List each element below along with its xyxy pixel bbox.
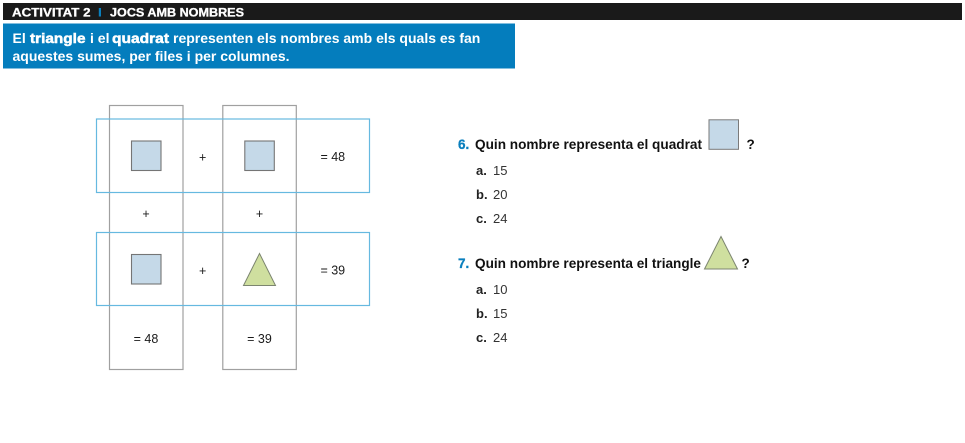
icon: triangle <box>704 236 738 269</box>
row outline 1 <box>96 119 370 192</box>
question 7: 7. <box>458 256 469 271</box>
instruction banner: aquestes sumes, per files i per columnes. <box>12 48 290 64</box>
question 6: 6. <box>458 137 469 152</box>
question 7: 15 <box>493 306 507 321</box>
question 7: 24 <box>493 330 507 345</box>
icon: square <box>709 120 738 149</box>
column outline 2 <box>223 106 296 370</box>
puzzle grid <box>96 106 370 370</box>
question 6: ? <box>746 137 755 152</box>
square row 1 column 2 <box>245 141 274 170</box>
header bar: activity title: ACTIVITAT 2 <box>12 8 90 20</box>
square row 2 column 1 <box>132 254 161 284</box>
column 1 sum: = 48 <box>134 332 158 346</box>
column outline 1 <box>110 106 183 370</box>
instruction banner: representen els nombres amb els quals es fan <box>173 30 480 46</box>
instruction banner: triangle <box>30 30 86 46</box>
question 7: b. <box>476 306 488 321</box>
question 7 <box>458 236 750 345</box>
question 6: a. <box>476 163 487 178</box>
question 6: 15 <box>493 163 507 178</box>
triangle row 2 column 2 <box>244 254 276 286</box>
row 1 sum: = 48 <box>320 150 345 164</box>
question 7: c. <box>476 330 487 345</box>
instruction banner: El <box>12 30 26 46</box>
question 7: Quin nombre representa el triangle <box>475 256 701 271</box>
instruction banner: i el <box>90 30 109 46</box>
row outline 2 <box>96 232 370 306</box>
question 6: b. <box>476 187 488 202</box>
row 2 sum: = 39 <box>320 264 345 278</box>
question 6 <box>458 120 755 226</box>
header bar: activity title <box>3 3 962 20</box>
column 2 sum: = 39 <box>247 332 272 346</box>
question 6: c. <box>476 211 487 226</box>
square row 1 column 1 <box>132 141 161 170</box>
question 7: 10 <box>493 282 507 297</box>
question 7: a. <box>476 282 487 297</box>
question 7: ? <box>742 256 750 271</box>
instruction banner <box>3 24 515 68</box>
plus column 2: + <box>256 207 263 221</box>
header bar: activity title: JOCS AMB NOMBRES <box>110 8 244 20</box>
question 6: Quin nombre representa el quadrat <box>475 137 702 152</box>
plus row 1: + <box>199 150 206 164</box>
instruction banner: quadrat <box>112 30 169 46</box>
question 6: 20 <box>493 187 507 202</box>
question 6: 24 <box>493 211 507 226</box>
plus row 2: + <box>199 264 206 278</box>
plus column 1: + <box>142 207 150 221</box>
